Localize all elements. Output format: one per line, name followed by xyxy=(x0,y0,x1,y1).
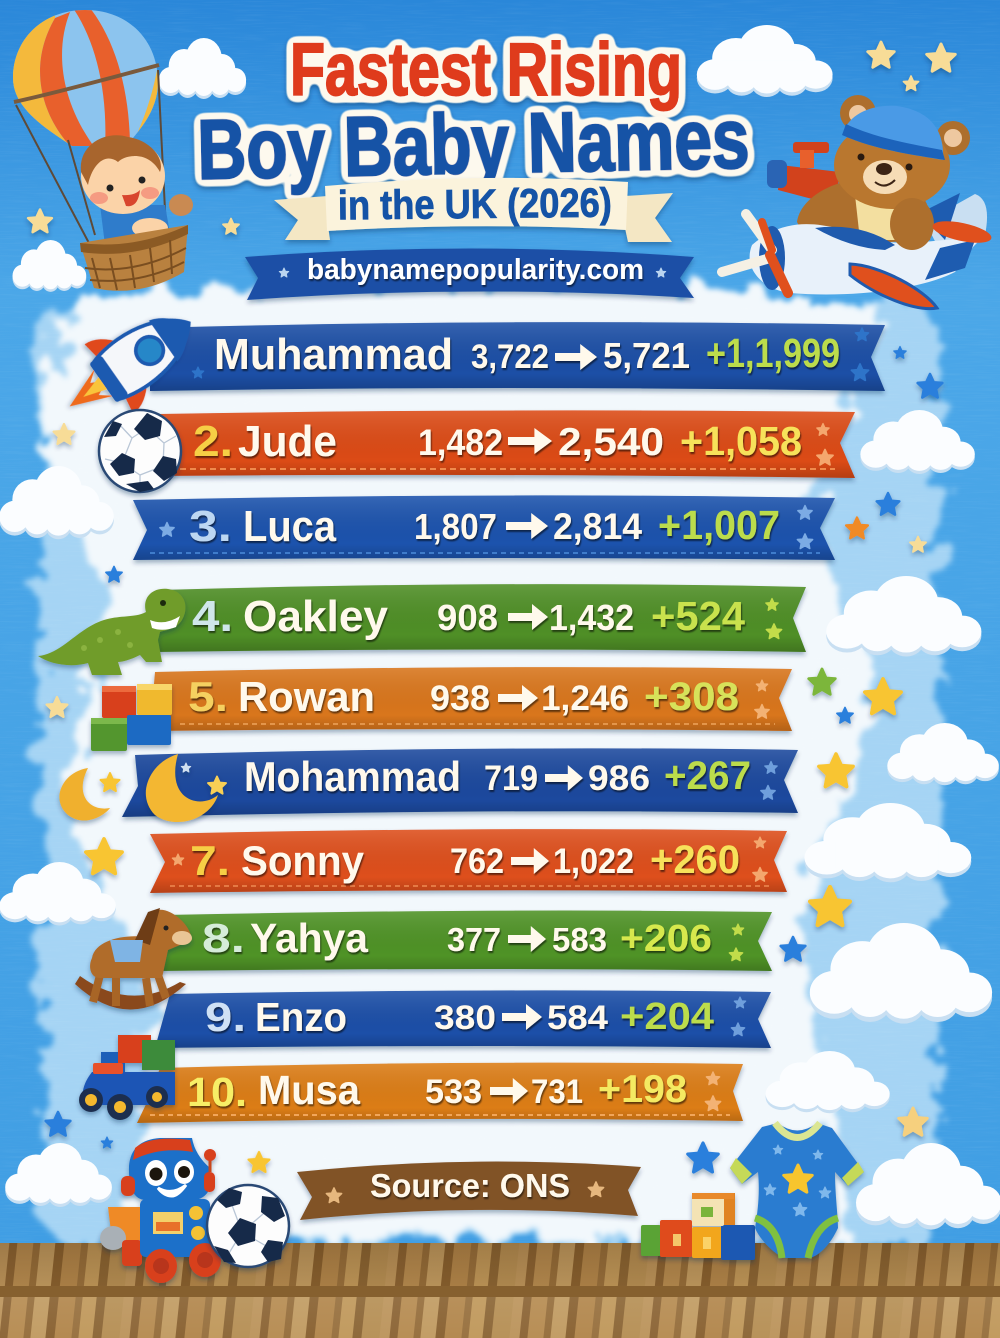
title line: Fastest Rising: Fastest Rising xyxy=(290,28,682,111)
row text: 719 xyxy=(484,759,538,798)
row text: +308 xyxy=(644,675,739,719)
red toy boat xyxy=(767,142,840,205)
row text: +1,058 xyxy=(680,418,802,464)
ribbon xyxy=(150,322,885,391)
icon: second soccer ball xyxy=(207,1185,289,1267)
row text: 1,246 xyxy=(541,679,629,718)
row text: Sonny xyxy=(241,837,365,884)
row text: 1,022 xyxy=(553,842,634,881)
row text: +260 xyxy=(650,838,740,882)
icon: rocket xyxy=(45,288,213,441)
row text: 377 xyxy=(447,921,501,958)
row text: 5. xyxy=(188,673,228,720)
icon: dinosaur xyxy=(38,589,186,675)
row text: 8. xyxy=(202,915,245,961)
row text xyxy=(190,837,740,884)
website banner xyxy=(245,248,694,300)
ribbon xyxy=(122,748,798,817)
row text: 938 xyxy=(430,679,490,718)
subtitle: in the UK (2026) xyxy=(338,180,612,228)
white centre wash xyxy=(40,282,880,1240)
row text: Enzo xyxy=(255,994,347,1040)
row text: 5,721 xyxy=(603,335,690,376)
row text: Musa xyxy=(258,1067,361,1113)
row text: 2,540 xyxy=(558,421,664,464)
ribbon xyxy=(155,584,806,652)
row text xyxy=(205,994,714,1040)
ribbon xyxy=(133,495,835,560)
row text xyxy=(192,592,745,641)
row text: 380 xyxy=(434,999,496,1037)
row text: 583 xyxy=(552,921,607,958)
cream ribbon xyxy=(274,178,673,242)
orange wing xyxy=(850,264,937,309)
plane fuselage xyxy=(750,224,978,294)
row text: +204 xyxy=(620,996,714,1038)
row text: 584 xyxy=(547,999,608,1037)
row text xyxy=(202,915,712,961)
ribbon xyxy=(150,410,855,478)
row text: 4. xyxy=(192,592,233,641)
ribbon xyxy=(137,1063,743,1123)
pale paint wash xyxy=(40,300,940,1245)
row text: 908 xyxy=(437,597,498,638)
row 9: Enzo xyxy=(155,990,771,1048)
row text: +206 xyxy=(620,918,712,960)
row 4: Oakley xyxy=(155,584,806,652)
row 2: Jude xyxy=(150,410,855,478)
row text xyxy=(188,673,739,720)
row text xyxy=(244,753,751,800)
row text: 1,432 xyxy=(549,597,634,638)
icon: teddy bear in plane xyxy=(722,95,993,309)
row 8: Yahya xyxy=(160,911,772,971)
row 7: Sonny xyxy=(150,829,787,893)
row text: 1,807 xyxy=(414,506,497,547)
icon: soccer ball xyxy=(99,410,181,492)
row 5: Rowan xyxy=(150,667,792,731)
row text: Oakley xyxy=(243,592,389,641)
icon: crescent moon small xyxy=(59,768,110,821)
row text xyxy=(193,417,802,466)
row text: 2,814 xyxy=(553,506,642,547)
row text: 10. xyxy=(187,1069,247,1115)
icon: floor blocks xyxy=(641,1193,755,1260)
row text: +198 xyxy=(598,1068,687,1111)
basket xyxy=(80,225,188,291)
row 6: Mohammad xyxy=(122,748,798,817)
icon: hot air balloon with baby xyxy=(0,0,193,291)
source banner xyxy=(297,1162,641,1220)
wooden floor xyxy=(0,1243,1000,1338)
wooden ribbon xyxy=(297,1162,641,1220)
icon: rocking horse xyxy=(75,908,192,1010)
website text: babynamepopularity.com xyxy=(307,254,644,286)
row text xyxy=(187,1067,687,1115)
row 10: Musa xyxy=(137,1063,743,1123)
baby head xyxy=(81,135,165,214)
row text: Rowan xyxy=(238,673,375,720)
row text: Jude xyxy=(238,417,337,466)
row text: 762 xyxy=(450,842,504,881)
decorative stars xyxy=(28,42,955,1172)
icon: baby onesie xyxy=(730,1123,864,1258)
row text: 3. xyxy=(189,502,232,551)
row 1: Muhammad xyxy=(150,322,885,391)
row text: 533 xyxy=(425,1073,482,1111)
row text: +1,1,999 xyxy=(706,330,840,376)
ribbon xyxy=(155,990,771,1048)
baby body xyxy=(100,205,172,245)
title xyxy=(196,28,750,300)
ribbon xyxy=(150,829,787,893)
baby hand xyxy=(169,194,193,216)
bear cap xyxy=(842,106,943,160)
row text xyxy=(189,502,780,551)
row text: Muhammad xyxy=(214,330,453,379)
title line: Boy Baby Names: Boy Baby Names xyxy=(196,91,750,197)
icon: toy blocks xyxy=(91,684,172,751)
propeller xyxy=(722,214,788,293)
plane tail fin xyxy=(925,194,987,270)
row text: +524 xyxy=(651,593,745,639)
source text: Source: ONS xyxy=(370,1167,570,1204)
row text: +1,007 xyxy=(658,502,780,548)
row text xyxy=(214,330,840,379)
orange tail plane xyxy=(931,217,993,247)
row text: Luca xyxy=(243,502,336,551)
icon: crescent moon large xyxy=(146,754,226,822)
row text: 3,722 xyxy=(471,338,549,376)
row text: Mohammad xyxy=(244,753,461,800)
row text: 731 xyxy=(531,1073,583,1111)
row text: Yahya xyxy=(250,915,369,961)
ribbon xyxy=(150,667,792,731)
row text: 9. xyxy=(205,994,246,1040)
row 3: Luca xyxy=(133,495,835,560)
icon: robot xyxy=(100,1138,221,1283)
bear arm xyxy=(890,198,934,250)
icon: toy truck xyxy=(79,1035,175,1120)
row text: 2. xyxy=(193,417,233,466)
row text: 1,482 xyxy=(418,422,503,463)
row text: +267 xyxy=(664,754,751,798)
row text: 986 xyxy=(588,759,650,798)
ribbon xyxy=(160,911,772,971)
row text: 7. xyxy=(190,837,230,884)
bear body xyxy=(797,178,931,245)
